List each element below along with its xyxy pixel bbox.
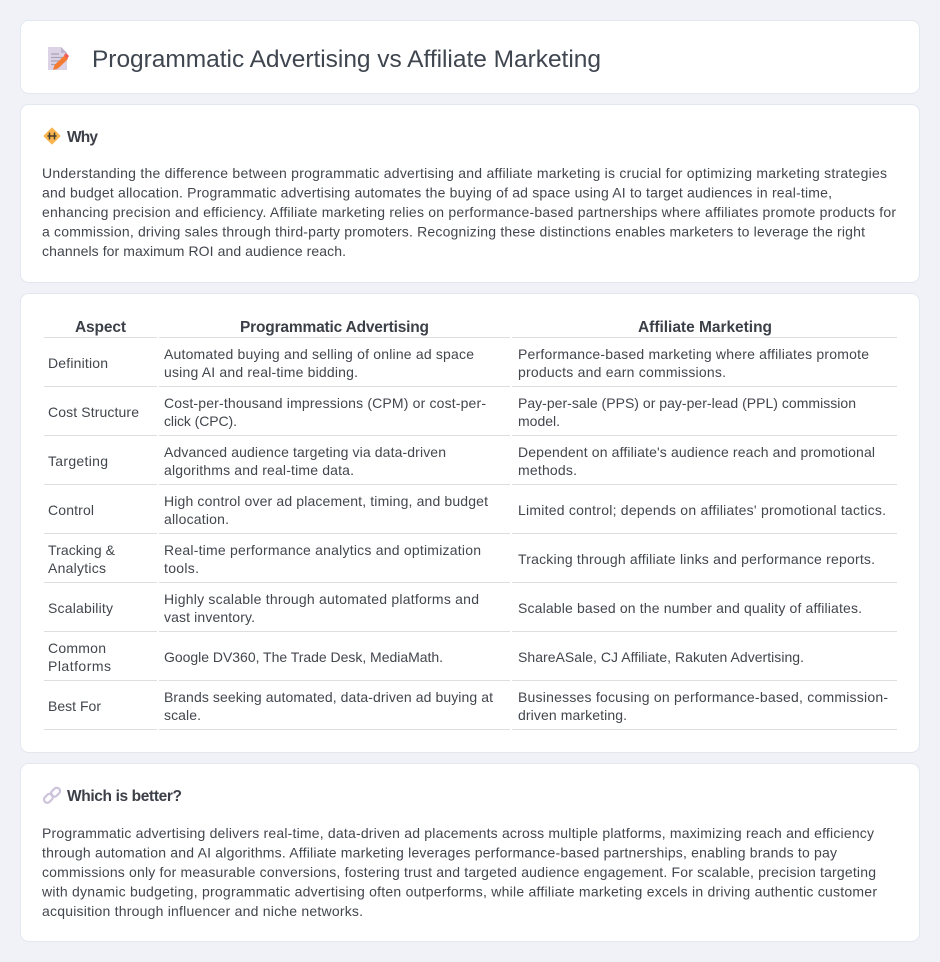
text block: which is better paragraph: through automation and AI algorithms. Affiliate marketing leverages performance-based partnerships, enabling brands to pay: [42, 844, 837, 860]
heading: which is better: Which is better?: [67, 788, 182, 805]
text block: which is better paragraph: commissions only for measurable conversions, fostering trust and targeted audience engagement. For scalable, precision targeting: [42, 864, 876, 880]
row: scalability: Highly scalable through automated platforms and: [164, 591, 479, 607]
row: cost structure: Pay-per-sale (PPS) or pay-per-lead (PPL) commission: [518, 395, 856, 411]
row: tracking and analytics: tools.: [164, 560, 199, 576]
icon: chain link: [43, 786, 61, 804]
text block: which is better paragraph: acquisition through influencer and niche networks.: [42, 903, 363, 919]
row: best for: Businesses focusing on performance-based, commission-: [518, 689, 888, 705]
row: best for: scale.: [164, 707, 201, 723]
row: control: allocation.: [164, 511, 229, 527]
table header row: Programmatic Advertising: [240, 319, 429, 336]
text block: which is better paragraph: with dynamic budgeting, programmatic advertising often outperforms, while affiliate marketing excels in driving authentic customer: [41, 884, 877, 900]
row: cost structure: Cost-per-thousand impressions (CPM) or cost-per-: [164, 395, 486, 411]
text block: why paragraph: a commission, driving sales through third-party promoters. Recognizing these distinctions enables marketers to leverage the right: [42, 224, 865, 240]
row: best for: Brands seeking automated, data-driven ad buying at: [164, 689, 493, 705]
row: definition: Automated buying and selling of online ad space: [164, 346, 474, 362]
row: definition: Performance-based marketing where affiliates promote: [518, 346, 869, 362]
text block: why paragraph: Understanding the difference between programmatic advertising and affiliate marketing is crucial for optimizing marketing strategies: [42, 165, 887, 181]
row: definition: products and earn commissions.: [518, 364, 726, 380]
text block: why paragraph: [42, 165, 896, 259]
row: scalability: vast inventory.: [164, 609, 255, 625]
table header row: [75, 319, 772, 336]
row: cost structure: [48, 395, 856, 429]
row: tracking and analytics: Tracking &: [48, 542, 116, 558]
panel: why: [20, 104, 920, 282]
text block: which is better paragraph: [41, 825, 877, 919]
row: best for: [48, 689, 888, 723]
row: common platforms: [48, 640, 804, 674]
row: cost structure: model.: [518, 413, 560, 429]
heading: why: Why: [67, 129, 98, 146]
row: control: High control over ad placement, timing, and budget: [164, 493, 488, 509]
text block: why paragraph: and budget allocation. Programmatic advertising automates the buying of ad space using AI to target audiences in real-time,: [42, 184, 832, 200]
row: definition: Definition: [48, 355, 108, 371]
row: targeting: methods.: [518, 462, 577, 478]
row: targeting: Advanced audience targeting via data-driven: [164, 444, 446, 460]
panel: title header: [20, 20, 920, 94]
row: scalability: [48, 591, 862, 625]
table header row: Aspect: [75, 319, 126, 336]
text block: why paragraph: channels for maximum ROI and audience reach.: [42, 243, 346, 259]
row: control: [48, 493, 886, 527]
row: common platforms: Platforms: [48, 658, 111, 674]
row: tracking and analytics: [48, 542, 875, 576]
row: targeting: Targeting: [48, 453, 108, 469]
panel: which is better: [20, 764, 920, 942]
row: tracking and analytics: Real-time performance analytics and optimization: [164, 542, 481, 558]
panel: comparison table: [20, 294, 920, 752]
row: scalability: Scalability: [48, 600, 113, 616]
row: common platforms: Google DV360, The Trade Desk, MediaMath.: [164, 649, 443, 665]
row: targeting: Dependent on affiliate's audience reach and promotional: [518, 444, 875, 460]
row: cost structure: Cost Structure: [48, 404, 139, 420]
row: common platforms: Common: [48, 640, 106, 656]
table header row: Affiliate Marketing: [638, 319, 772, 336]
icon: document with pencil: [48, 47, 69, 70]
row: tracking and analytics: Tracking through affiliate links and performance reports.: [518, 551, 875, 567]
row: best for: driven marketing.: [518, 707, 627, 723]
row: targeting: algorithms and real-time data.: [164, 462, 354, 478]
row: definition: [48, 346, 869, 380]
row: common platforms: ShareASale, CJ Affiliate, Rakuten Advertising.: [518, 649, 804, 665]
row: scalability: Scalable based on the number and quality of affiliates.: [518, 600, 862, 616]
row: tracking and analytics: Analytics: [48, 560, 106, 576]
row: definition: using AI and real-time bidding.: [164, 364, 358, 380]
title: Programmatic Advertising vs Affiliate Marketing: [92, 46, 601, 73]
row: control: Limited control; depends on affiliates' promotional tactics.: [518, 502, 886, 518]
text block: which is better paragraph: Programmatic advertising delivers real-time, data-driven ad placements across multiple platforms, maximizing reach and efficiency: [42, 825, 874, 841]
row: best for: Best For: [48, 698, 101, 714]
row: cost structure: click (CPC).: [164, 413, 237, 429]
icon: warning diamond: [44, 128, 60, 144]
text block: why paragraph: enhancing precision and efficiency. Affiliate marketing relies on performance-based partnerships where affiliates promote products for: [42, 204, 896, 220]
row: targeting: [48, 444, 875, 478]
row: control: Control: [48, 502, 94, 518]
